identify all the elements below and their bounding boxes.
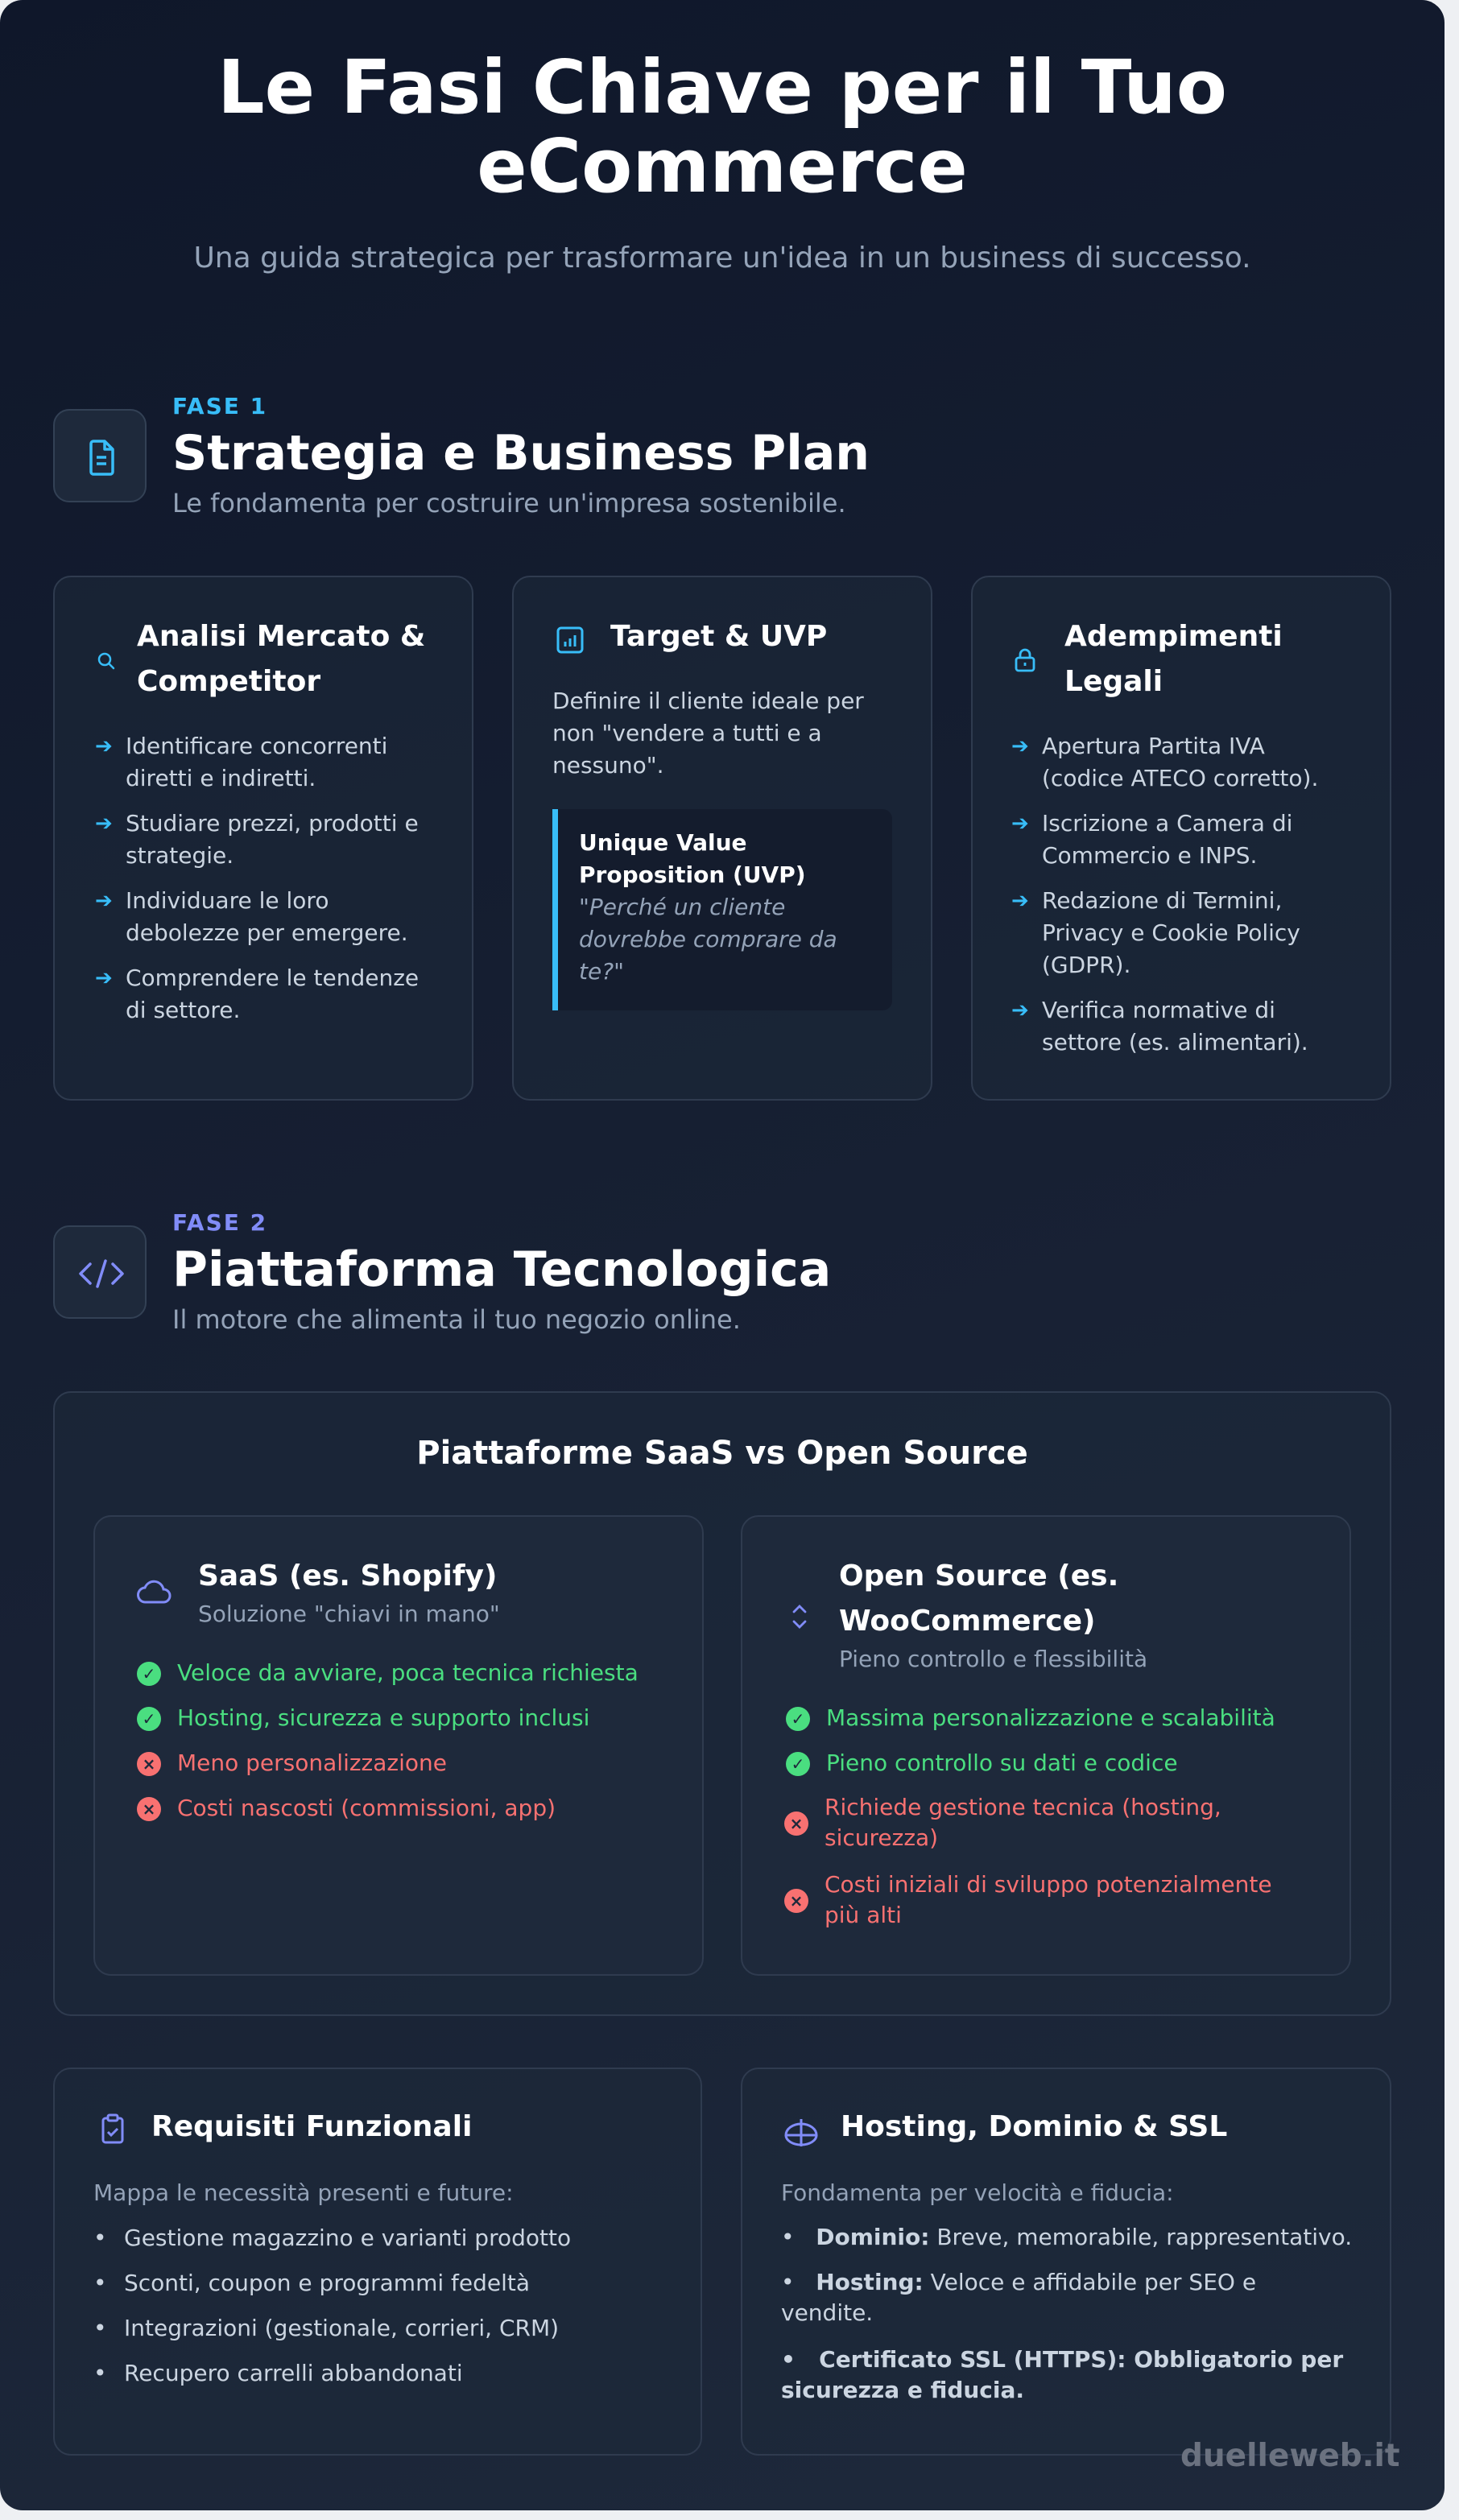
icon: clipboard — [101, 2114, 124, 2143]
pros cons list — [784, 1704, 1275, 1928]
bullet list: Redazione di Termini, — [1042, 887, 1282, 914]
subheading: Pieno controllo e flessibilità — [839, 1646, 1147, 1672]
bullet list: Commercio e INPS. — [1042, 842, 1257, 869]
bullet list — [1011, 733, 1318, 1056]
pros cons list: Costi iniziali di sviluppo potenzialmente — [825, 1871, 1272, 1898]
heading subtitle: Le fondamenta per costruire un'impresa sostenibile. — [172, 488, 846, 518]
heading: SaaS (es. Shopify) — [198, 1560, 497, 1593]
bullet list: ➔ — [1011, 734, 1029, 758]
label fase 1: FASE 1 — [172, 393, 267, 419]
bullet list: sicurezza e fiducia. — [781, 2377, 1024, 2403]
pros cons list: Costi nascosti (commissioni, app) — [177, 1795, 556, 1821]
callout: UVP: Proposition (UVP) — [579, 861, 806, 888]
bullet list: ➔ — [1011, 812, 1029, 836]
bullet list: debolezze per emergere. — [126, 919, 408, 946]
bullet list: Iscrizione a Camera di — [1042, 810, 1292, 837]
pros cons list: Hosting, sicurezza e supporto inclusi — [177, 1704, 589, 1731]
panel: analisi mercato — [53, 576, 473, 1101]
bullet list: Recupero carrelli abbandonati — [124, 2360, 463, 2386]
pros cons list: ✓ — [143, 1664, 155, 1683]
callout: UVP: dovrebbe comprare da — [579, 926, 837, 952]
bullet list — [93, 2225, 571, 2386]
icon: code — [53, 1225, 147, 1319]
watermark: duelleweb.it — [1180, 2438, 1400, 2474]
card heading — [137, 620, 425, 698]
icon: globe — [784, 2119, 818, 2146]
icon: lock — [1015, 649, 1035, 671]
card heading — [1064, 620, 1283, 698]
card heading: Analisi Mercato & — [137, 620, 425, 653]
pros cons list: × — [143, 1754, 155, 1774]
intro: Mappa le necessità presenti e future: — [93, 2179, 514, 2206]
icon: document — [53, 409, 147, 502]
phase 1 header — [53, 393, 870, 518]
sub-panel: open source — [741, 1515, 1351, 1976]
bullet list: ➔ — [95, 966, 113, 990]
bullet list: Apertura Partita IVA — [1042, 733, 1265, 759]
pros cons list: più alti — [825, 1902, 902, 1928]
bullet list: ➔ — [1011, 998, 1029, 1022]
bullet list: diretti e indiretti. — [126, 765, 316, 791]
bullet list: • Dominio: Breve, memorabile, rappresentativo. — [781, 2224, 1352, 2250]
label fase 2: FASE 2 — [172, 1209, 267, 1236]
pros cons list: × — [790, 1814, 803, 1833]
bullet list: Privacy e Cookie Policy — [1042, 919, 1300, 946]
pros cons list: ✓ — [143, 1709, 155, 1729]
subtitle: Una guida strategica per trasformare un'idea in un business di successo. — [193, 242, 1251, 275]
panel title: Piattaforme SaaS vs Open Source — [416, 1435, 1028, 1472]
bullet list: Integrazioni (gestionale, corrieri, CRM) — [124, 2315, 559, 2341]
heading: Strategia e Business Plan — [172, 425, 870, 481]
bullet list: • Certificato SSL (HTTPS): Obbligatorio per — [781, 2346, 1343, 2373]
panel: analisi mercato: di settore. — [126, 997, 240, 1023]
title: eCommerce — [477, 123, 968, 209]
heading: Piattaforma Tecnologica — [172, 1241, 831, 1298]
text: non "vendere a tutti e a — [552, 720, 822, 746]
pros cons list: Richiede gestione tecnica (hosting, — [825, 1794, 1221, 1820]
text — [552, 688, 864, 779]
bullet list: settore (es. alimentari). — [1042, 1029, 1308, 1056]
title: Le Fasi Chiave per il Tuo — [217, 44, 1227, 130]
subheading: Soluzione "chiavi in mano" — [198, 1601, 500, 1627]
heading: Open Source (es. — [839, 1560, 1118, 1593]
callout: UVP: Unique Value — [579, 829, 747, 856]
heading: Hosting, Dominio & SSL — [841, 2110, 1227, 2143]
bullet list: vendite. — [781, 2299, 873, 2326]
pros cons list: Veloce da avviare, poca tecnica richiesta — [177, 1659, 639, 1686]
text: Definire il cliente ideale per — [552, 688, 864, 714]
text: nessuno". — [552, 752, 664, 779]
title — [217, 44, 1227, 209]
callout: UVP: "Perché un cliente — [579, 894, 785, 920]
heading: Requisiti Funzionali — [151, 2110, 472, 2143]
panel: requisiti funzionali — [53, 2068, 702, 2456]
panel: adempimenti legali — [971, 576, 1391, 1101]
bullet list: Identificare concorrenti — [126, 733, 387, 759]
bullet list: Comprendere le tendenze — [126, 965, 419, 991]
heading — [839, 1560, 1118, 1638]
bullet list: (codice ATECO corretto). — [1042, 765, 1318, 791]
bullet list: Studiare prezzi, prodotti e — [126, 810, 419, 837]
bullet list: • — [93, 2225, 107, 2251]
sub-panel: saas — [93, 1515, 704, 1976]
pros cons list: Massima personalizzazione e scalabilità — [826, 1704, 1275, 1731]
bullet list: ➔ — [95, 734, 113, 758]
heading subtitle: Il motore che alimenta il tuo negozio online. — [172, 1304, 741, 1335]
icon: chart — [557, 626, 583, 654]
bullet list: • — [93, 2315, 107, 2341]
pros cons list: Pieno controllo su dati e codice — [826, 1750, 1178, 1776]
bullet list: ➔ — [1011, 889, 1029, 913]
bullet list — [95, 733, 419, 1023]
bullet list: Individuare le loro — [126, 887, 329, 914]
bullet list: (GDPR). — [1042, 952, 1130, 978]
bullet list: • — [93, 2270, 107, 2296]
pros cons list — [137, 1659, 639, 1821]
pros cons list: Meno personalizzazione — [177, 1750, 447, 1776]
bullet list: Gestione magazzino e varianti prodotto — [124, 2225, 571, 2251]
pros cons list: × — [790, 1891, 803, 1911]
card heading: Competitor — [137, 665, 320, 698]
icon: search — [98, 652, 114, 670]
bullet list: Verifica normative di — [1042, 997, 1275, 1023]
intro: Fondamenta per velocità e fiducia: — [781, 2179, 1174, 2206]
card heading: Legali — [1064, 665, 1163, 698]
bullet list: strategie. — [126, 842, 234, 869]
panel: hosting dominio ssl — [741, 2068, 1391, 2456]
pros cons list: sicurezza) — [825, 1824, 938, 1851]
icon: chevrons — [792, 1605, 807, 1629]
bullet list: • Hosting: Veloce e affidabile per SEO e — [781, 2269, 1256, 2295]
panel: target uvp — [512, 576, 932, 1101]
pros cons list: ✓ — [791, 1709, 804, 1729]
bullet list: Sconti, coupon e programmi fedeltà — [124, 2270, 530, 2296]
phase 2 header — [53, 1209, 831, 1335]
callout: UVP: te?" — [579, 958, 624, 985]
icon: cloud — [137, 1580, 171, 1604]
bullet list: • — [93, 2360, 107, 2386]
bullet list: ➔ — [95, 812, 113, 836]
heading: WooCommerce) — [839, 1605, 1095, 1638]
pros cons list: ✓ — [791, 1754, 804, 1774]
pros cons list: × — [143, 1799, 155, 1819]
card heading: Target & UVP — [610, 620, 827, 653]
panel: saas vs open source — [53, 1391, 1391, 2016]
bullet list: ➔ — [95, 889, 113, 913]
bullet list — [781, 2224, 1352, 2403]
callout: UVP — [552, 809, 892, 1010]
card heading: Adempimenti — [1064, 620, 1283, 653]
